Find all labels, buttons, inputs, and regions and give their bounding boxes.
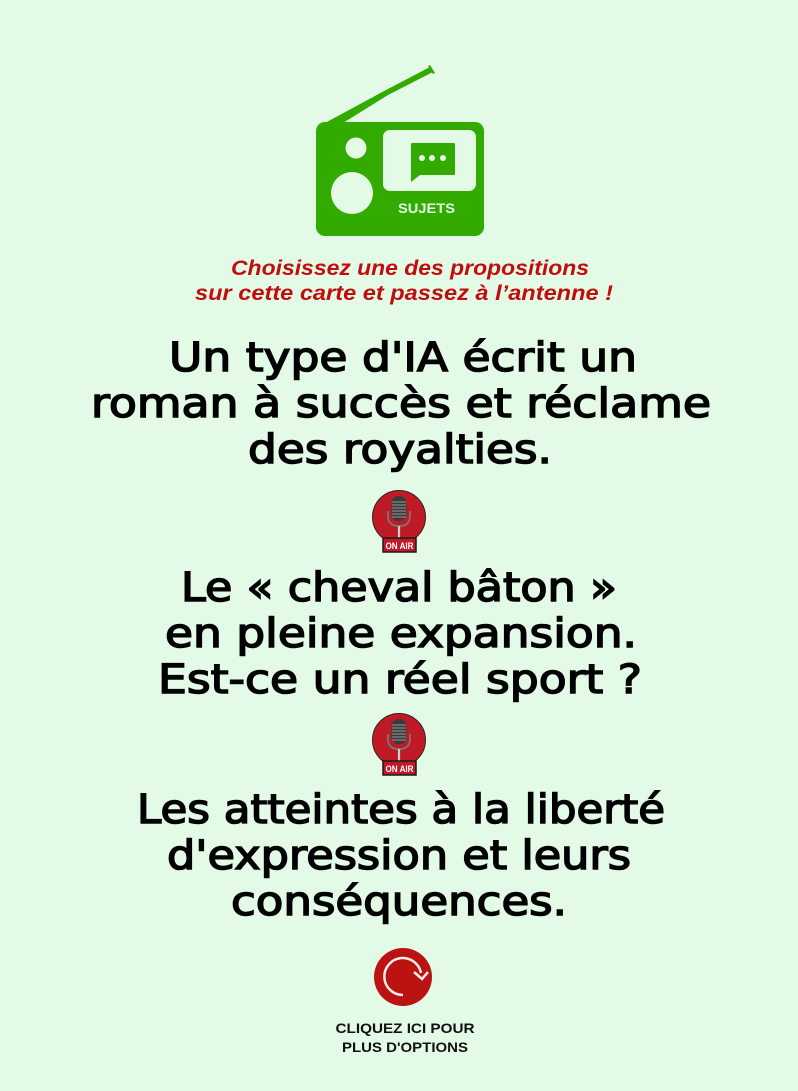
text: instruction: sur cette carte et passez à l’antenne ! <box>195 282 613 305</box>
icon: on air microphone <box>372 714 426 775</box>
text: call to action: CLIQUEZ ICI POUR <box>336 1020 474 1036</box>
heading: topic 2: Est-ce un réel sport ? <box>158 657 642 703</box>
heading: topic 1 <box>91 335 711 473</box>
text: instruction <box>195 257 613 305</box>
heading: topic 3: conséquences. <box>231 879 567 925</box>
heading: topic 2: Le « cheval bâton » <box>181 565 617 611</box>
heading: topic 3: d'expression et leurs <box>167 833 631 879</box>
icon: on air microphone: ON AIR <box>386 541 414 551</box>
icon: on air microphone: ON AIR <box>386 764 414 774</box>
text: instruction: Choisissez une des propositions <box>231 257 589 280</box>
heading: topic 1: roman à succès et réclame <box>91 381 711 427</box>
text: call to action <box>336 1020 474 1055</box>
heading: topic 1: Un type d'IA écrit un <box>169 335 637 381</box>
icon: radio <box>316 65 484 236</box>
icon: radio: SUJETS <box>398 200 455 216</box>
heading: topic 1: des royalties. <box>248 427 552 473</box>
heading: topic 2 <box>158 565 642 703</box>
heading: topic 3: Les atteintes à la liberté <box>137 787 665 833</box>
text: call to action: PLUS D'OPTIONS <box>342 1039 468 1055</box>
icon: on air microphone <box>372 490 426 552</box>
icon: refresh button <box>374 948 432 1006</box>
heading: topic 3 <box>137 787 665 925</box>
heading: topic 2: en pleine expansion. <box>165 611 637 657</box>
